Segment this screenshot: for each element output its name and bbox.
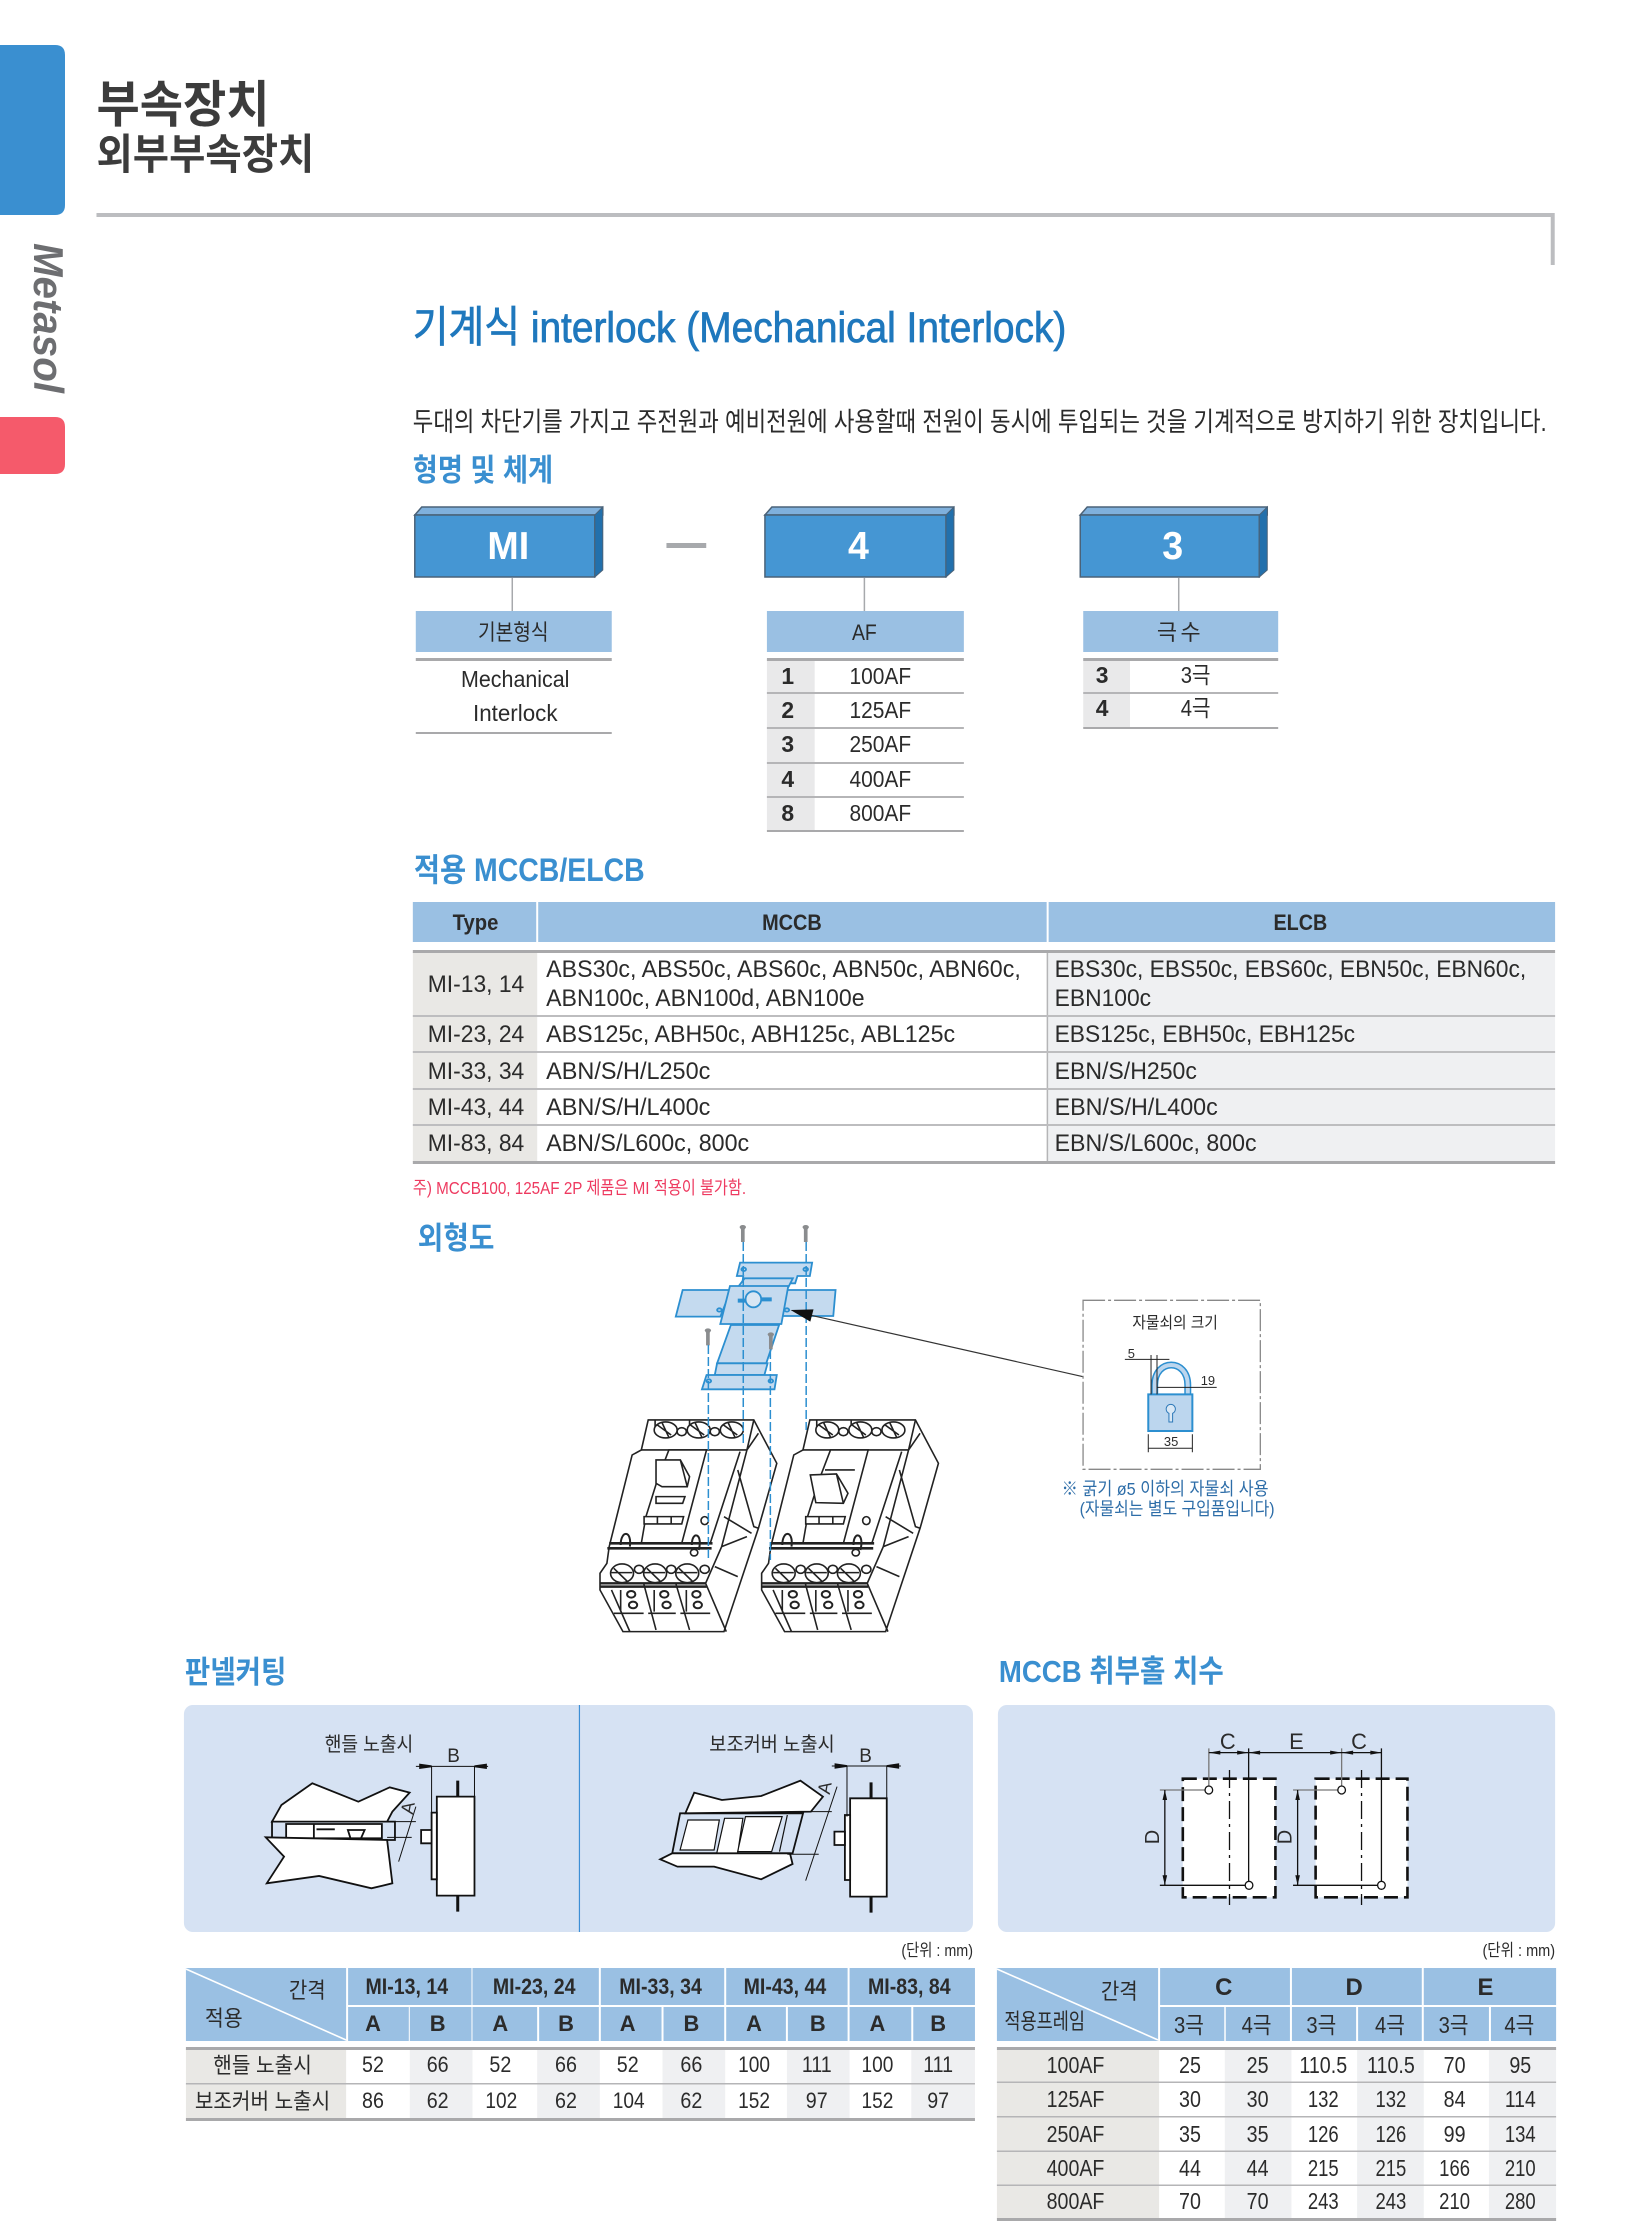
padlock note bbox=[1062, 1479, 1275, 1519]
dimension letters: B bbox=[859, 1746, 872, 1767]
table: applicable MCCB/ELCB: MI-23, 24 bbox=[428, 1021, 524, 1048]
table: applicable MCCB/ELCB: ABN/S/H/L250c bbox=[546, 1058, 710, 1085]
table: mounting hole dimensions: 3극 bbox=[1439, 2012, 1469, 2038]
model code: AF column: 2 bbox=[781, 697, 794, 723]
dimension letters: A bbox=[397, 1800, 419, 1816]
table: panel cutting dimensions: 간격 bbox=[289, 1978, 326, 2003]
table: applicable MCCB/ELCB: MI-33, 34 bbox=[428, 1058, 524, 1085]
table: panel cutting dimensions: 100 bbox=[738, 2052, 770, 2077]
model code: poles column: 3 bbox=[1096, 662, 1108, 688]
table: panel cutting dimensions: MI-33, 34 bbox=[619, 1974, 703, 1999]
padlock labels bbox=[1128, 1314, 1218, 1449]
table: mounting hole dimensions: 243 bbox=[1376, 2188, 1406, 2214]
table: panel cutting dimensions: 152 bbox=[738, 2088, 770, 2113]
table: panel cutting dimensions bbox=[186, 1968, 975, 2121]
table: mounting hole dimensions: 84 bbox=[1444, 2086, 1466, 2112]
handle left breaker bbox=[656, 1460, 690, 1503]
screws bbox=[705, 1225, 809, 1349]
table: mounting hole dimensions: 25 bbox=[1179, 2052, 1201, 2078]
table: mounting hole dimensions: 4극 bbox=[1375, 2012, 1405, 2038]
model code: AF column: 4 bbox=[781, 766, 794, 792]
table: applicable MCCB/ELCB: MI-13, 14 bbox=[428, 971, 524, 998]
aux cover exposed drawing bbox=[660, 1764, 901, 1913]
label: handle exposed: 핸들 노출시 bbox=[325, 1733, 413, 1756]
table: applicable MCCB/ELCB: EBN/S/L600c, 800c bbox=[1055, 1130, 1257, 1157]
table: panel cutting dimensions: A bbox=[492, 2011, 508, 2036]
model code: AF column: 3 bbox=[781, 731, 794, 757]
table: panel cutting dimensions: MI-23, 24 bbox=[493, 1974, 576, 1999]
side tab: blue bbox=[0, 45, 65, 215]
section heading: mechanical interlock: 기계식 interlock (Mechanical Interlock) bbox=[413, 304, 1066, 352]
model code: AF column: AF bbox=[852, 620, 877, 645]
table: applicable MCCB/ELCB: EBN/S/H250c bbox=[1055, 1058, 1197, 1085]
model code: poles column: 3 bbox=[1162, 525, 1183, 568]
table: panel cutting dimensions: A bbox=[620, 2011, 636, 2036]
page title: 부속장치 bbox=[96, 77, 270, 133]
table: mounting hole dimensions: 적용프레임 bbox=[1004, 2009, 1085, 2034]
label: auxiliary cover exposed: 보조커버 노출시 bbox=[709, 1733, 835, 1756]
table: mounting hole dimensions: 114 bbox=[1505, 2086, 1536, 2112]
table: panel cutting dimensions: 62 bbox=[427, 2088, 449, 2113]
table: panel cutting dimensions: MI-43, 44 bbox=[744, 1974, 827, 1999]
model code: poles column: 4극 bbox=[1181, 695, 1211, 721]
table: mounting hole dimensions: 215 bbox=[1376, 2155, 1406, 2181]
table: mounting hole dimensions: 243 bbox=[1308, 2188, 1339, 2214]
table: mounting hole dimensions: 4극 bbox=[1504, 2012, 1534, 2038]
table: applicable MCCB/ELCB: ABN/S/L600c, 800c bbox=[546, 1130, 749, 1157]
table: mounting hole dimensions: E bbox=[1477, 1974, 1493, 2001]
table: mounting hole dimensions: 간격 bbox=[1101, 1979, 1138, 2004]
table: applicable MCCB/ELCB: ABS125c, ABH50c, ABH125c, ABL125c bbox=[546, 1021, 955, 1048]
padlock note: ※ 굵기 ø5 이하의 자물쇠 사용 bbox=[1062, 1479, 1269, 1499]
table: mounting hole dimensions: 3극 bbox=[1174, 2012, 1204, 2038]
heading: MCCB mounting hole dimensions: MCCB 취부홀 치수 bbox=[999, 1654, 1224, 1689]
dimension letters: E bbox=[1289, 1729, 1304, 1754]
table: mounting hole dimensions: 800AF bbox=[1047, 2188, 1104, 2214]
unit label right: (단위 : mm) bbox=[1482, 1941, 1555, 1960]
table: mounting hole dimensions: 4극 bbox=[1242, 2012, 1272, 2038]
table: mounting hole dimensions: 166 bbox=[1439, 2155, 1470, 2181]
table: mounting hole dimensions: 3극 bbox=[1306, 2012, 1336, 2038]
table: mounting hole dimensions: 25 bbox=[1247, 2052, 1269, 2078]
table: panel cutting dimensions: 보조커버 노출시 bbox=[195, 2089, 330, 2114]
table: mounting hole dimensions: 132 bbox=[1308, 2086, 1339, 2112]
table: mounting hole dimensions bbox=[997, 1968, 1556, 2221]
padlock labels: 5 bbox=[1128, 1346, 1135, 1361]
table: panel cutting dimensions: 111 bbox=[923, 2052, 953, 2077]
model code: MI column: MI bbox=[487, 525, 529, 568]
table: mounting hole dimensions: 132 bbox=[1376, 2086, 1406, 2112]
model code: poles column: 극수 bbox=[1157, 620, 1201, 645]
heading: applicable MCCB/ELCB: 적용 MCCB/ELCB bbox=[414, 852, 645, 888]
table: panel cutting dimensions: 104 bbox=[613, 2088, 645, 2113]
table: panel cutting dimensions: 적용 bbox=[205, 2006, 243, 2031]
model code: poles column bbox=[1080, 507, 1278, 729]
drawings bbox=[266, 1764, 901, 1913]
table: panel cutting dimensions: B bbox=[558, 2011, 574, 2036]
side label: Metasol: Metasol bbox=[25, 243, 72, 394]
dimension letters: B bbox=[447, 1746, 460, 1767]
table: applicable MCCB/ELCB: ELCB bbox=[1274, 910, 1327, 935]
panel: mounting hole dimensions bbox=[998, 1705, 1555, 1932]
table: applicable MCCB/ELCB: EBS125c, EBH50c, EBH125c bbox=[1055, 1021, 1355, 1048]
table: mounting hole dimensions: 70 bbox=[1444, 2052, 1466, 2078]
table: mounting hole dimensions: 280 bbox=[1505, 2188, 1536, 2214]
table: panel cutting dimensions: B bbox=[930, 2011, 946, 2036]
model code: AF column: 400AF bbox=[849, 766, 911, 792]
padlock labels: 19 bbox=[1201, 1373, 1215, 1388]
table: mounting hole dimensions: D bbox=[1345, 1974, 1363, 2001]
table: panel cutting dimensions: 52 bbox=[617, 2052, 639, 2077]
header rule bbox=[96, 215, 1553, 265]
table: panel cutting dimensions: 62 bbox=[555, 2088, 577, 2113]
table: mounting hole dimensions: 134 bbox=[1505, 2121, 1536, 2147]
table: mounting hole dimensions: 95 bbox=[1509, 2052, 1531, 2078]
table: applicable MCCB/ELCB: ABN100c, ABN100d, ABN100e bbox=[546, 985, 865, 1012]
model code: AF column: 8 bbox=[781, 800, 794, 826]
model code: poles column: 4 bbox=[1096, 695, 1109, 721]
heading: model designation: 형명 및 체계 bbox=[413, 453, 553, 488]
table: panel cutting dimensions: B bbox=[810, 2011, 826, 2036]
padlock labels: 35 bbox=[1164, 1434, 1178, 1449]
model code: AF column: 100AF bbox=[849, 663, 911, 689]
table: applicable MCCB/ELCB: EBN100c bbox=[1055, 985, 1151, 1012]
table: applicable MCCB/ELCB: EBN/S/H/L400c bbox=[1055, 1094, 1218, 1121]
table: mounting hole dimensions: C bbox=[1215, 1974, 1232, 2001]
table: applicable MCCB/ELCB: MCCB bbox=[762, 910, 822, 935]
handle exposed drawing bbox=[266, 1765, 488, 1912]
table: panel cutting dimensions: B bbox=[683, 2011, 699, 2036]
dashed alignment lines bbox=[708, 1242, 806, 1560]
dimension letters bbox=[397, 1746, 872, 1816]
table: panel cutting dimensions: A bbox=[746, 2011, 762, 2036]
table: applicable MCCB/ELCB: MI-43, 44 bbox=[428, 1094, 524, 1121]
table: mounting hole dimensions: 30 bbox=[1247, 2086, 1269, 2112]
table: panel cutting dimensions: 102 bbox=[485, 2088, 517, 2113]
table: mounting hole dimensions: 70 bbox=[1247, 2188, 1269, 2214]
table: panel cutting dimensions: 86 bbox=[362, 2088, 384, 2113]
table: mounting hole dimensions: 30 bbox=[1179, 2086, 1201, 2112]
dimension letters: C bbox=[1220, 1729, 1236, 1754]
interlock bracket bbox=[676, 1263, 836, 1389]
table: panel cutting dimensions: MI-13, 14 bbox=[366, 1974, 449, 1999]
table: applicable MCCB/ELCB: MI-83, 84 bbox=[428, 1130, 524, 1157]
table: mounting hole dimensions: 126 bbox=[1376, 2121, 1406, 2147]
heading: panel cutting: 판넬커팅 bbox=[185, 1655, 286, 1690]
table note: 주) MCCB100, 125AF 2P 제품은 MI 적용이 불가함. bbox=[413, 1178, 746, 1198]
table: panel cutting dimensions: A bbox=[365, 2011, 381, 2036]
table: mounting hole dimensions: 125AF bbox=[1047, 2086, 1104, 2112]
table: panel cutting dimensions: 97 bbox=[927, 2088, 949, 2113]
panel: panel cutting diagrams bbox=[184, 1705, 973, 1932]
unit label left: (단위 : mm) bbox=[901, 1941, 973, 1960]
model code: AF column: 1 bbox=[781, 663, 794, 689]
table: mounting hole dimensions: 110.5 bbox=[1299, 2052, 1347, 2078]
table: panel cutting dimensions: 66 bbox=[427, 2052, 449, 2077]
table: mounting hole dimensions: 100AF bbox=[1047, 2052, 1104, 2078]
padlock note: (자물쇠는 별도 구입품입니다) bbox=[1080, 1499, 1275, 1519]
model code: MI column: 기본형식 bbox=[478, 620, 549, 645]
table: mounting hole dimensions: 210 bbox=[1505, 2155, 1536, 2181]
table: mounting hole dimensions: 126 bbox=[1308, 2121, 1339, 2147]
model code: poles column: 3극 bbox=[1181, 662, 1211, 688]
table: mounting hole dimensions: 210 bbox=[1439, 2188, 1470, 2214]
padlock detail box bbox=[1083, 1300, 1260, 1469]
table: panel cutting dimensions: 핸들 노출시 bbox=[213, 2053, 312, 2078]
handle right breaker bbox=[810, 1470, 855, 1503]
side tab: red bbox=[0, 417, 65, 474]
page title bbox=[96, 77, 314, 178]
table: panel cutting dimensions: 52 bbox=[362, 2052, 384, 2077]
dimension letters bbox=[1142, 1729, 1367, 1844]
dash between codes bbox=[666, 543, 706, 548]
table: applicable MCCB/ELCB bbox=[413, 902, 1555, 1164]
breaker right bbox=[762, 1420, 938, 1632]
table: mounting hole dimensions: 44 bbox=[1247, 2155, 1269, 2181]
table: mounting hole dimensions: 35 bbox=[1247, 2121, 1269, 2147]
table: applicable MCCB/ELCB: ABS30c, ABS50c, ABS60c, ABN50c, ABN60c, bbox=[546, 956, 1021, 983]
model code: AF column bbox=[765, 507, 964, 832]
dimension letters: A bbox=[814, 1780, 836, 1796]
dimension letters: C bbox=[1351, 1729, 1367, 1754]
model code: MI column: Mechanical bbox=[461, 666, 569, 692]
table: panel cutting dimensions: MI-83, 84 bbox=[868, 1974, 951, 1999]
table: panel cutting dimensions: B bbox=[430, 2011, 446, 2036]
table: mounting hole dimensions: 35 bbox=[1179, 2121, 1201, 2147]
table: applicable MCCB/ELCB: EBS30c, EBS50c, EBS60c, EBN50c, EBN60c, bbox=[1055, 956, 1526, 983]
padlock labels: 자물쇠의 크기 bbox=[1132, 1314, 1218, 1332]
breaker left bbox=[600, 1420, 777, 1632]
model code: MI column bbox=[415, 507, 612, 734]
leader arrow bbox=[791, 1309, 1086, 1377]
table: panel cutting dimensions: A bbox=[870, 2011, 886, 2036]
table: panel cutting dimensions: 111 bbox=[802, 2052, 832, 2077]
model code: AF column: 250AF bbox=[849, 731, 911, 757]
table: mounting hole dimensions: 215 bbox=[1308, 2155, 1339, 2181]
table: applicable MCCB/ELCB: ABN/S/H/L400c bbox=[546, 1094, 710, 1121]
table: panel cutting dimensions: 52 bbox=[489, 2052, 511, 2077]
heading: outline drawing: 외형도 bbox=[418, 1221, 494, 1256]
table: mounting hole dimensions: 44 bbox=[1179, 2155, 1201, 2181]
model code: AF column: 800AF bbox=[849, 800, 911, 826]
dimension letters: D bbox=[1274, 1830, 1296, 1844]
table: applicable MCCB/ELCB: Type bbox=[453, 910, 498, 935]
table: panel cutting dimensions: 66 bbox=[680, 2052, 702, 2077]
table: panel cutting dimensions: 152 bbox=[862, 2088, 893, 2113]
table: mounting hole dimensions: 99 bbox=[1444, 2121, 1466, 2147]
table: mounting hole dimensions: 250AF bbox=[1047, 2121, 1104, 2147]
table: mounting hole dimensions: 110.5 bbox=[1367, 2052, 1415, 2078]
model code: MI column: Interlock bbox=[473, 700, 558, 726]
page title: 외부부속장치 bbox=[96, 131, 314, 178]
table: panel cutting dimensions: 97 bbox=[806, 2088, 828, 2113]
table: panel cutting dimensions: 100 bbox=[862, 2052, 893, 2077]
table: mounting hole dimensions: 400AF bbox=[1047, 2155, 1104, 2181]
hole pattern drawing bbox=[1160, 1748, 1407, 1905]
model code: AF column: 4 bbox=[848, 525, 869, 568]
model code: AF column: 125AF bbox=[849, 697, 911, 723]
table: panel cutting dimensions: 62 bbox=[680, 2088, 702, 2113]
table: mounting hole dimensions: 70 bbox=[1179, 2188, 1201, 2214]
table: panel cutting dimensions: 66 bbox=[555, 2052, 577, 2077]
dimension letters: D bbox=[1142, 1830, 1164, 1844]
diagram: interlock assembly on two breakers bbox=[600, 1225, 1260, 1632]
